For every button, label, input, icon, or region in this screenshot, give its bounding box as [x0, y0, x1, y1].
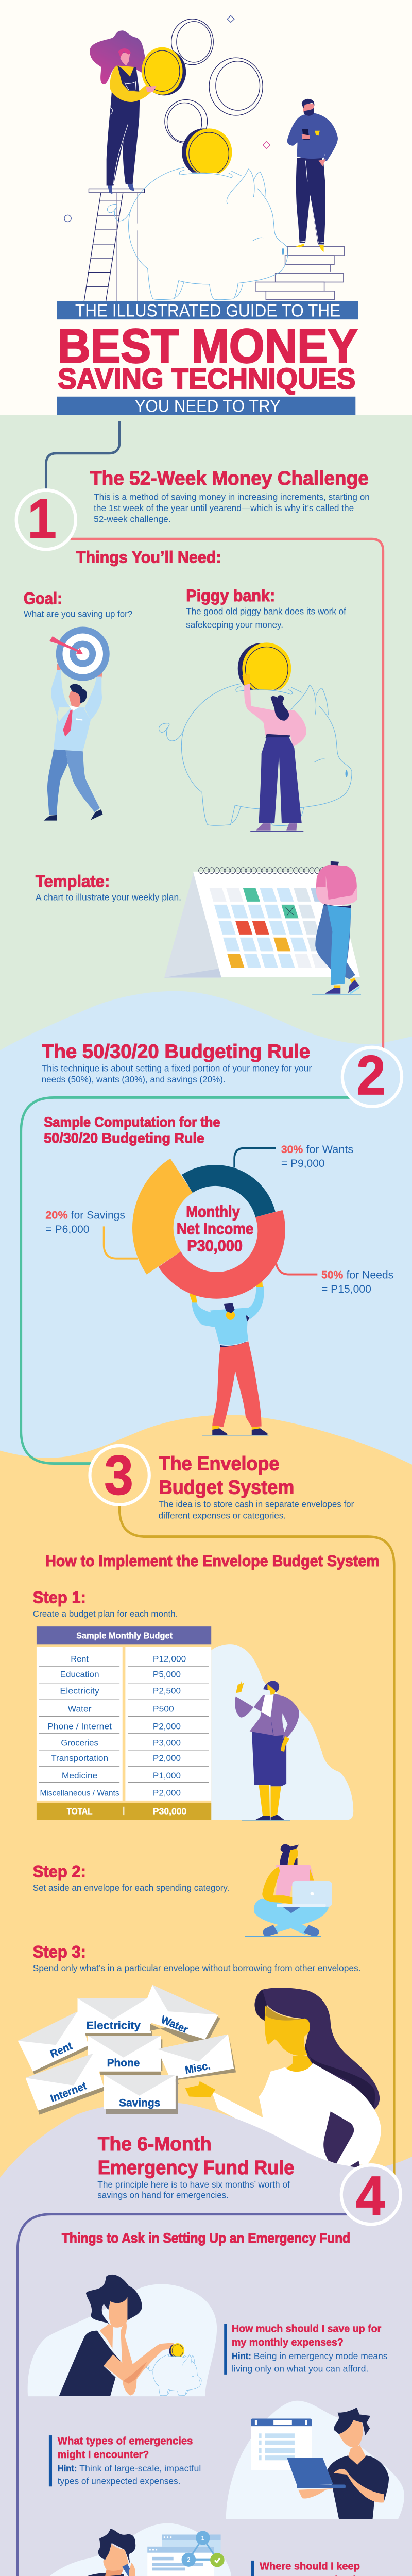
- illustration: person on phone with laptop: 2: [187, 2557, 190, 2564]
- connector line from title: [46, 421, 119, 489]
- table: sample monthly budget: Miscellaneous / Wants: [40, 1789, 119, 1798]
- donut center label: P30,000: [187, 1237, 243, 1255]
- question 1: living only on what you can afford.: [232, 2364, 368, 2374]
- question 2: What types of emergencies: [58, 2435, 193, 2447]
- callout: savings: [45, 1209, 138, 1259]
- number badge 1: 1: [28, 488, 57, 550]
- illustration: person with laptop: [226, 2401, 404, 2519]
- number badge 2: [342, 1045, 402, 1107]
- table: sample monthly budget: P12,000: [153, 1654, 186, 1664]
- donut chart: 50/30/20: [132, 1159, 285, 1299]
- illustration: person on phone with laptop: 1: [201, 2535, 205, 2541]
- envelope: savings: [104, 2075, 178, 2114]
- title: saving techniques: SAVING TECHNIQUES: [58, 362, 355, 395]
- section 1: 52-week money challenge: [16, 421, 383, 1048]
- callout: needs: for Needs: [346, 1269, 393, 1281]
- table: sample monthly budget: P500: [153, 1704, 174, 1714]
- text: goal: Goal:: [24, 589, 62, 608]
- illustration: man with phone: [287, 99, 338, 252]
- description: The idea is to store cash in separate envelopes for: [159, 1499, 354, 1510]
- callout: savings: for Savings: [71, 1209, 125, 1222]
- illustration: large woman with long hair: [185, 1988, 381, 2168]
- title: best money: BEST MONEY: [58, 319, 358, 373]
- table: sample monthly budget: P3,000: [153, 1738, 181, 1748]
- donut center label: [177, 1203, 253, 1255]
- table: sample monthly budget: P2,500: [153, 1686, 181, 1696]
- text: piggy bank: The good old piggy bank does its work of: [186, 606, 346, 617]
- illustration: woman pointing up: [235, 1680, 299, 1820]
- table: sample monthly budget: Rent: [71, 1654, 89, 1664]
- purple connector line: [18, 2214, 347, 2576]
- table: sample monthly budget: P5,000: [153, 1670, 181, 1679]
- section 4 heading: Emergency Fund Rule: [98, 2157, 294, 2178]
- text: piggy bank: [186, 586, 346, 630]
- illustration: person holding donut chart: [189, 1280, 268, 1435]
- heading: The 52-Week Money Challenge: [90, 467, 369, 489]
- description: This is a method of saving money in increasing increments, starting on: [94, 492, 370, 502]
- title block: [57, 301, 358, 416]
- text: piggy bank: Piggy bank:: [186, 586, 275, 605]
- envelope: rent: Rent: [48, 2040, 74, 2060]
- number badge 2: 2: [356, 1045, 385, 1107]
- heading: things to ask: Things to Ask in Setting Up an Emergency Fund: [62, 2230, 350, 2246]
- step 1: [33, 1588, 178, 1619]
- illustration: calendar: [164, 868, 360, 978]
- table: sample monthly budget: Electricity: [60, 1686, 100, 1696]
- envelope: water: [141, 1985, 220, 2042]
- number badge 4: [341, 2165, 401, 2227]
- number badge 3: [90, 1445, 149, 1506]
- question 2: Think of large-scale, impactful: [79, 2464, 201, 2473]
- illustration: woman at big piggy bank: [159, 642, 352, 831]
- section 4 description: [97, 2180, 290, 2200]
- description: 52-week challenge.: [94, 514, 171, 524]
- background: blue section: [0, 991, 412, 2576]
- question 3: Where should I keep: [260, 2561, 360, 2572]
- background blob behind woman: [211, 1644, 353, 1820]
- step 1: Create a budget plan for each month.: [33, 1609, 178, 1619]
- envelope: electricity: [78, 1998, 152, 2036]
- donut center label: Net Income: [177, 1220, 253, 1238]
- step 2: Set aside an envelope for each spending category.: [33, 1883, 229, 1893]
- title band: you need to try: YOU NEED TO TRY: [135, 396, 281, 416]
- background: yellow section: [0, 1415, 412, 2576]
- question 3: [251, 2561, 402, 2576]
- icon: piggy bank outline: [107, 167, 288, 300]
- heading: sample computation: Sample Computation for the: [44, 1114, 220, 1130]
- description: different expenses or categories.: [159, 1511, 286, 1520]
- heading: sample computation: [44, 1114, 220, 1146]
- section 2 heading: The 50/30/20 Budgeting Rule: [42, 1040, 310, 1062]
- envelope: savings: Savings: [119, 2097, 160, 2109]
- description: [94, 492, 370, 524]
- heading: Budget System: [159, 1477, 294, 1498]
- text: goal: [24, 589, 132, 619]
- number badge 4: 4: [356, 2165, 385, 2227]
- text: template: Template:: [36, 872, 110, 891]
- gold connector line: [119, 1505, 394, 2177]
- illustration: woman holding a coin: [90, 30, 186, 194]
- table: sample monthly budget: TOTAL: [67, 1806, 93, 1817]
- ladder: [84, 189, 145, 301]
- section 4: emergency fund: [18, 2165, 404, 2576]
- illustration: person on phone with laptop: [31, 2523, 231, 2576]
- green connector line: [21, 1097, 352, 1464]
- number badge 1: [16, 488, 76, 550]
- heading: sample computation: 50/30/20 Budgeting Rule: [44, 1130, 204, 1146]
- callout: needs: 50%: [321, 1269, 343, 1281]
- text: goal: What are you saving up for?: [24, 609, 132, 619]
- question 1: How much should I save up for: [232, 2323, 382, 2335]
- section 4 heading: The 6-Month: [98, 2133, 212, 2155]
- table: sample monthly budget: [37, 1626, 211, 1820]
- heading: how to implement: How to Implement the Envelope Budget System: [45, 1552, 380, 1570]
- callout: wants: 30%: [281, 1143, 303, 1156]
- text: template: A chart to illustrate your weekly plan.: [36, 892, 181, 903]
- question 2: [49, 2435, 201, 2486]
- text: piggy bank: safekeeping your money.: [186, 620, 283, 630]
- step 3: [33, 1942, 361, 1973]
- title band: you need to try: [57, 396, 355, 416]
- illustration: person with small piggy bank: [28, 2275, 217, 2396]
- table: sample monthly budget: P30,000: [153, 1806, 186, 1817]
- question 1: Hint:: [232, 2351, 251, 2361]
- table: sample monthly budget: P2,000: [153, 1788, 181, 1798]
- text: template: [36, 872, 181, 903]
- table: sample monthly budget: Phone / Internet: [47, 1722, 112, 1732]
- step 2: [33, 1862, 229, 1893]
- section 4 description: The principle here is to have six months’ worth of: [97, 2180, 290, 2190]
- section 2 description: [42, 1063, 312, 1084]
- callout: wants: for Wants: [306, 1143, 353, 1156]
- illustration: person beside calendar: [312, 861, 361, 994]
- callout: wants: [234, 1143, 353, 1170]
- section 4 heading: [98, 2133, 294, 2178]
- heading: The Envelope: [159, 1453, 279, 1475]
- table: sample monthly budget: Groceries: [61, 1738, 98, 1748]
- question 1: my monthly expenses?: [232, 2337, 344, 2348]
- section 4 description: savings on hand for emergencies.: [97, 2190, 229, 2200]
- section 3: envelope budget system: [33, 1445, 394, 2177]
- step 3: Spend only what’s in a particular envelope without borrowing from other envelopes.: [33, 1963, 361, 1973]
- table: sample monthly budget: Sample Monthly Budget: [76, 1631, 173, 1641]
- number badge 3: 3: [105, 1445, 133, 1506]
- question 1: Being in emergency mode means: [254, 2351, 388, 2361]
- callout: savings: = P6,000: [45, 1223, 89, 1235]
- section 2 description: This technique is about setting a fixed portion of your money for your: [42, 1063, 312, 1074]
- step 3: Step 3:: [33, 1942, 86, 1961]
- step 2: Step 2:: [33, 1862, 86, 1881]
- illustration: man holding target: [44, 626, 110, 821]
- heading: things you'll need: Things You’ll Need:: [76, 547, 221, 567]
- question 2: might I encounter?: [58, 2449, 149, 2461]
- envelope: water: Water: [159, 2013, 190, 2036]
- question 2: types of unexpected expenses.: [58, 2476, 181, 2486]
- description: [159, 1499, 354, 1520]
- header illustration: [64, 15, 344, 301]
- envelope: internet: Internet: [49, 2080, 88, 2105]
- step 1: Step 1:: [33, 1588, 86, 1607]
- table: sample monthly budget: Water: [68, 1704, 92, 1714]
- envelope: misc: Misc.: [184, 2060, 211, 2076]
- table: sample monthly budget: Medicine: [62, 1771, 97, 1781]
- description: the 1st week of the year until yearend—which is why it’s called the: [94, 503, 354, 513]
- callout: needs: = P15,000: [321, 1283, 371, 1295]
- table: sample monthly budget: P2,000: [153, 1722, 181, 1732]
- question 2: Hint:: [58, 2463, 77, 2473]
- envelope: rent: [18, 2011, 89, 2074]
- coin stack: [255, 247, 344, 300]
- title band: the illustrated guide: THE ILLUSTRATED GUIDE TO THE: [75, 301, 340, 321]
- section 2 description: needs (50%), wants (30%), and savings (20%).: [42, 1075, 226, 1084]
- table: sample monthly budget: Transportation: [51, 1753, 108, 1763]
- envelope: phone: Phone: [107, 2057, 140, 2069]
- table: sample monthly budget: P2,000: [153, 1753, 181, 1763]
- callout: savings: 20%: [45, 1209, 68, 1222]
- background: lavender section: [0, 2102, 412, 2576]
- table: sample monthly budget: P1,000: [153, 1771, 181, 1781]
- section 1: template: [21, 861, 402, 1464]
- illustration: woman sitting with laptop: [245, 1844, 332, 1937]
- question 1: [224, 2323, 388, 2375]
- heading: [159, 1453, 294, 1498]
- callout: wants: = P9,000: [281, 1157, 325, 1170]
- envelope: internet: [25, 2053, 104, 2115]
- steps 2 and 3: [18, 1844, 361, 2178]
- icon: coin entering piggy bank: [182, 128, 232, 176]
- envelope: phone: [88, 2036, 162, 2075]
- icon: decorative diamonds and dot: [64, 15, 270, 222]
- callout: needs: [276, 1261, 393, 1295]
- donut center label: Monthly: [186, 1203, 240, 1221]
- envelope: misc: [157, 2035, 236, 2084]
- pink connector line: [71, 539, 383, 1048]
- envelope: electricity: Electricity: [86, 2020, 141, 2031]
- icon: outline coins: [165, 19, 263, 143]
- table: sample monthly budget: Education: [60, 1670, 99, 1679]
